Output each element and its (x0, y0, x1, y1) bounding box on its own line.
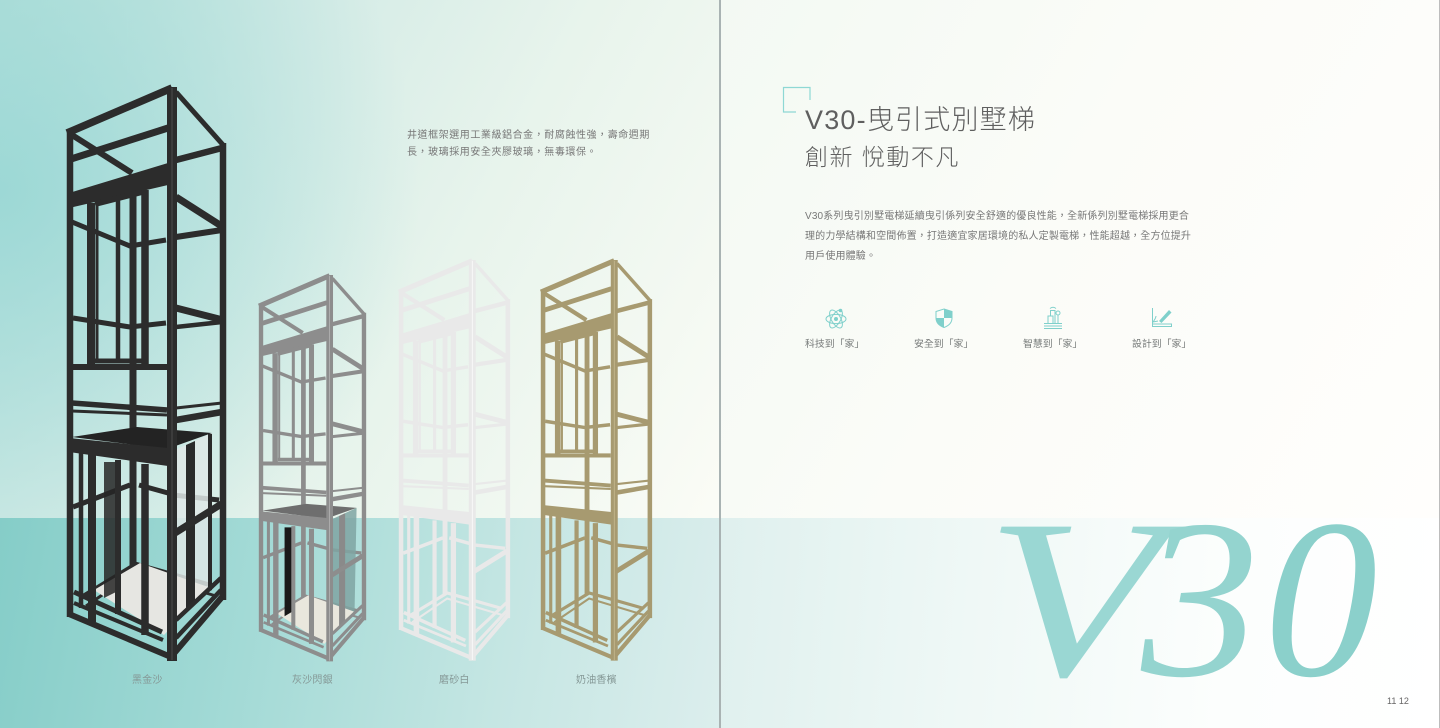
intro paragraph: V30系列曳引別墅電梯延續曳引係列安全舒適的優良性能，全新係列別墅電梯採用更合 (805, 211, 1189, 222)
icon: atom (826, 308, 846, 330)
elevator car: black sand (72, 427, 212, 635)
title: V30-曳引式別墅梯 (805, 105, 1036, 135)
elevator: grey silver (259, 275, 365, 661)
elevator: cream champagne (541, 260, 651, 661)
big V30 mark: V (985, 474, 1193, 725)
left page description (407, 129, 650, 158)
colour label: grey: 灰沙閃銀 (292, 674, 333, 686)
background: right page upper (720, 0, 1440, 518)
feature label: safety: 安全到「家」 (914, 339, 973, 350)
feature label: design: 設計到「家」 (1132, 339, 1191, 350)
elevator car: grey silver (262, 504, 357, 644)
icon: smart city (1044, 307, 1062, 328)
left page description: 長，玻璃採用安全夾膠玻璃，無毒環保。 (407, 147, 597, 158)
subtitle: 創新 悅動不凡 (805, 144, 960, 170)
icon: design pen (1152, 308, 1172, 326)
icon: shield (936, 309, 952, 328)
background: left page upper (0, 0, 720, 518)
intro paragraph: 用戶使用體驗。 (805, 251, 876, 262)
elevator: black sand (67, 87, 224, 661)
big V30 mark: 0 (1264, 474, 1378, 725)
feature label: technology: 科技到「家」 (805, 339, 864, 350)
left page description: 井道框架選用工業級鋁合金，耐腐蝕性強，壽命週期 (407, 130, 650, 140)
elevator: frosted white (399, 260, 509, 661)
feature label: smart: 智慧到「家」 (1023, 339, 1082, 350)
colour label: champagne: 奶油香檳 (576, 674, 617, 686)
colour label: white: 磨砂白 (439, 674, 470, 686)
title bracket (784, 88, 810, 112)
big V30 mark (985, 474, 1378, 725)
right edge line (1439, 0, 1440, 728)
big V30 mark: 3 (1140, 474, 1259, 725)
colour label: black: 黑金沙 (132, 674, 163, 686)
background: left page lower band (0, 518, 720, 728)
page fold line (719, 0, 721, 728)
intro paragraph (805, 210, 1191, 262)
background: right page lower band (720, 518, 1440, 728)
intro paragraph: 理的力學結構和空間佈置，打造適宜家居環境的私人定製電梯，性能超越，全方位提升 (805, 231, 1191, 242)
page numbers: 11 12 (1387, 696, 1409, 706)
